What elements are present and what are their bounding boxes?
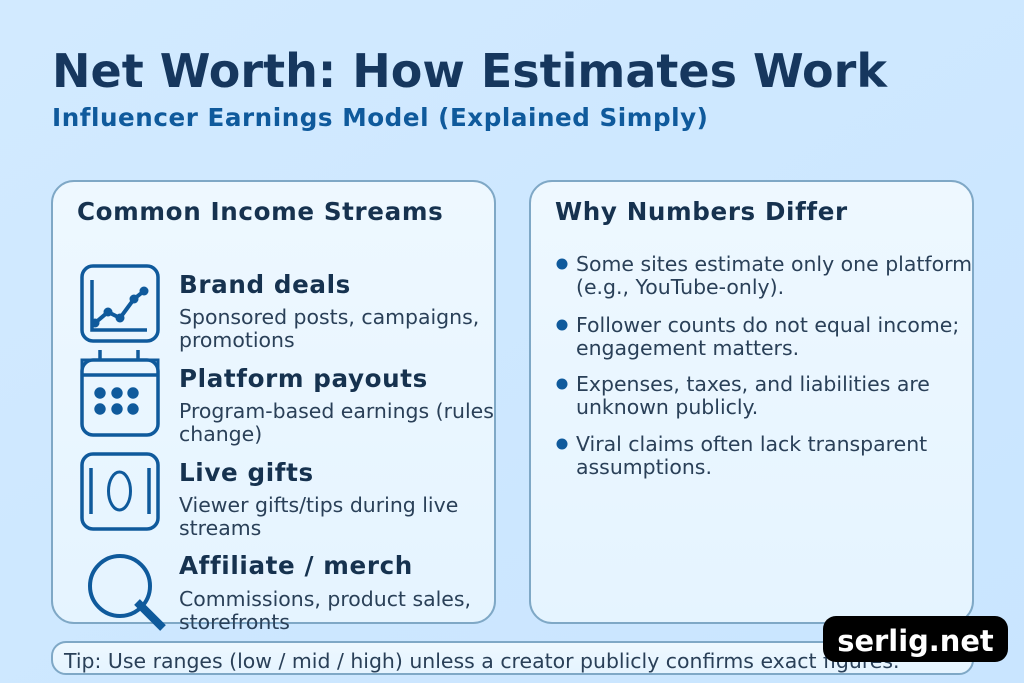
platform payouts text [179, 364, 494, 446]
bullet 1 [556, 252, 972, 299]
bullet 3 [556, 372, 930, 419]
panel: why numbers differ [530, 181, 973, 623]
bullet 4: assumptions. [576, 455, 712, 479]
affiliate and merch text: Affiliate / merch [179, 551, 413, 580]
live gifts text: Viewer gifts/tips during live [179, 493, 458, 517]
live gifts text: streams [179, 516, 261, 540]
brand deals text [179, 270, 479, 352]
bullet 4 [556, 432, 927, 479]
bullet 1: (e.g., YouTube-only). [576, 275, 784, 299]
brand deals text: Sponsored posts, campaigns, [179, 305, 479, 329]
affiliate and merch text [179, 551, 471, 634]
live gifts text: Live gifts [179, 458, 314, 487]
watermark badge [823, 616, 1008, 662]
bullet 3: Expenses, taxes, and liabilities are [576, 372, 930, 396]
brand deals text: promotions [179, 328, 295, 352]
icon: calendar [82, 350, 158, 435]
platform payouts text: Program-based earnings (rules [179, 399, 494, 423]
panel: common income streams [52, 181, 495, 634]
icon: gift box [82, 454, 158, 529]
watermark badge: serlig.net [837, 624, 994, 658]
platform payouts text: Platform payouts [179, 364, 428, 393]
affiliate and merch text: Commissions, product sales, [179, 587, 471, 611]
icon: line chart [82, 266, 158, 341]
bullet 2: Follower counts do not equal income; [576, 313, 959, 337]
bullet 2 [556, 313, 959, 360]
bullet 1: Some sites estimate only one platform [576, 252, 972, 276]
title: Net Worth: How Estimates Work [52, 44, 888, 98]
affiliate and merch text: storefronts [179, 610, 290, 634]
subtitle: Influencer Earnings Model (Explained Simply) [52, 103, 708, 132]
bullet 4: Viral claims often lack transparent [576, 432, 927, 456]
panel heading: why numbers differ: Why Numbers Differ [555, 197, 848, 226]
tip bar: Tip: Use ranges (low / mid / high) unless a creator publicly confirms exact figures. [63, 649, 900, 673]
panel heading: income streams: Common Income Streams [77, 197, 443, 226]
platform payouts text: change) [179, 422, 262, 446]
icon: magnifier [90, 556, 163, 628]
bullet 2: engagement matters. [576, 336, 799, 360]
live gifts text [179, 458, 458, 540]
bullet 3: unknown publicly. [576, 395, 758, 419]
brand deals text: Brand deals [179, 270, 351, 299]
tip bar [52, 642, 973, 674]
